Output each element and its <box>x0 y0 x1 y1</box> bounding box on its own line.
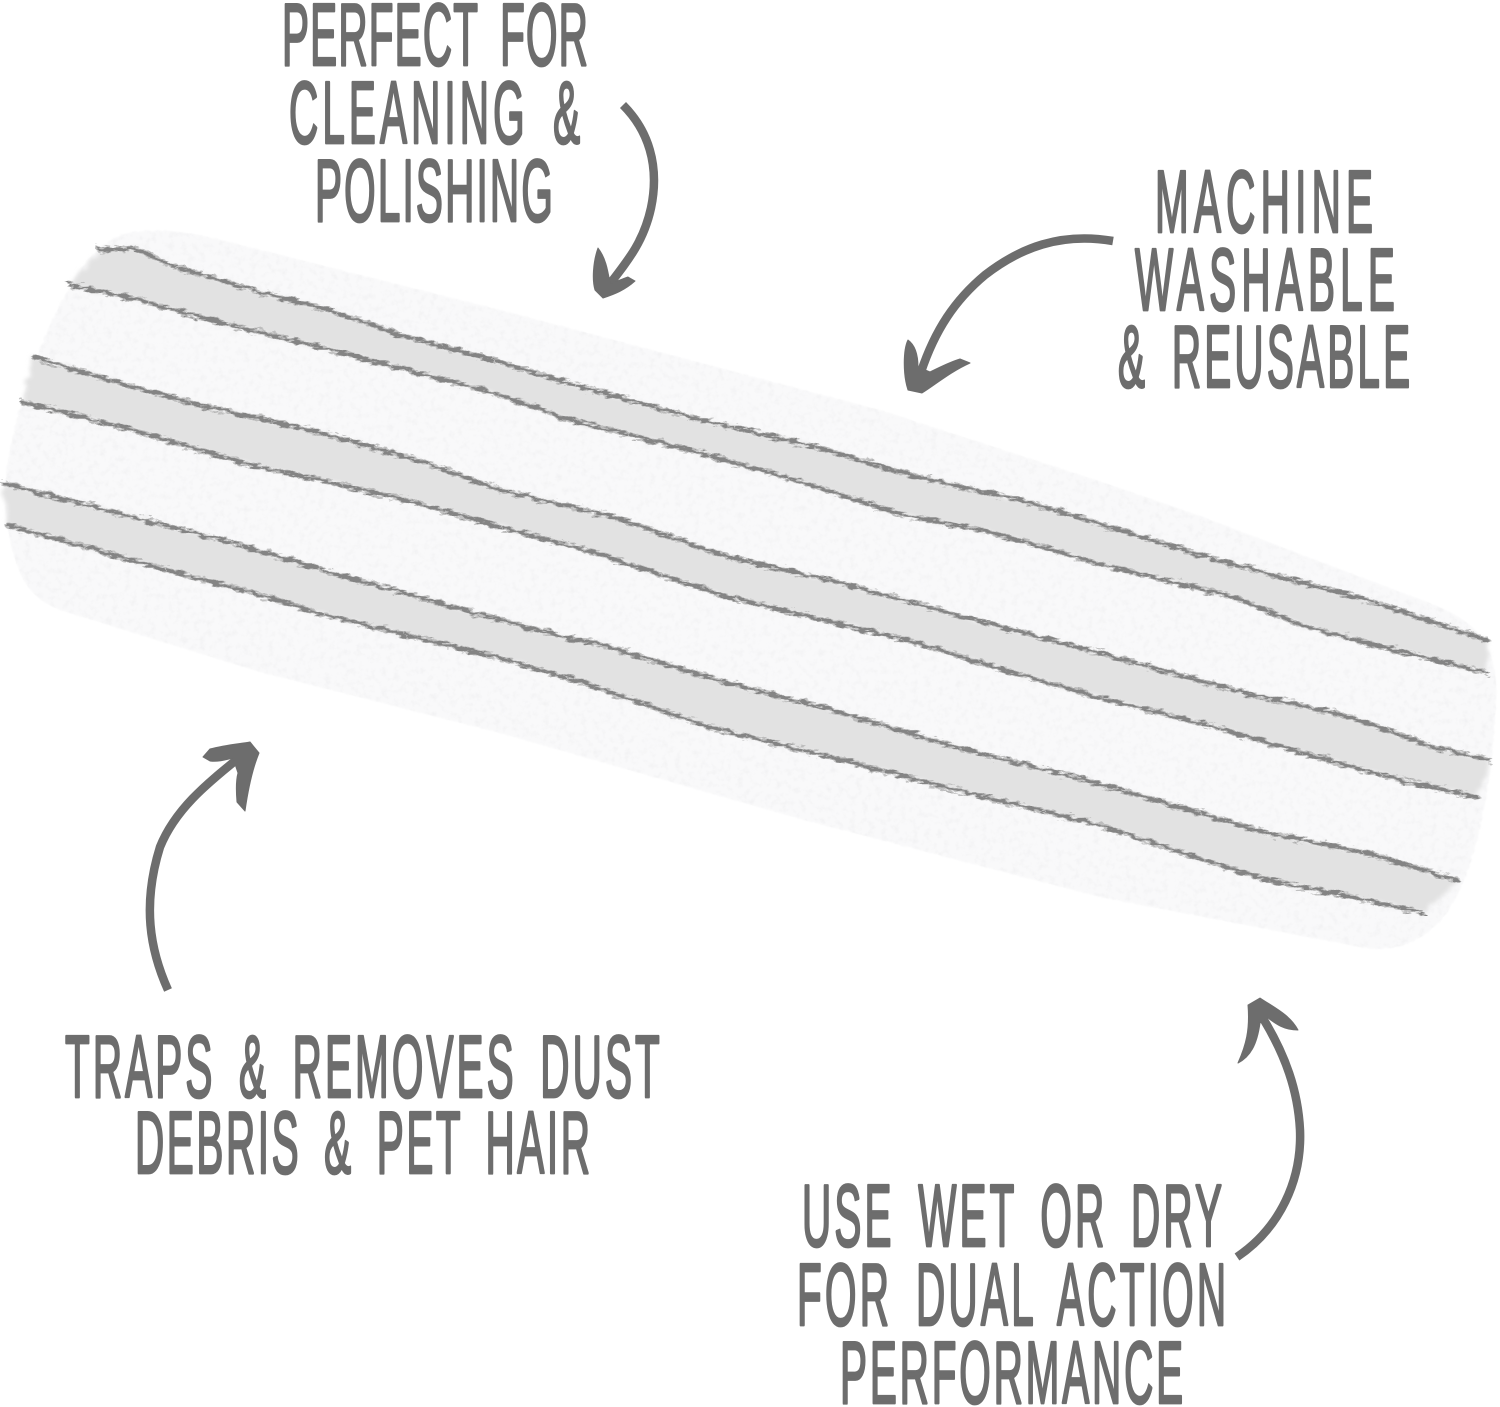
callout: use wet or dry: USE WET OR DRY <box>802 1166 1222 1265</box>
fleece texture <box>0 220 1500 960</box>
stripe edge lines <box>3 248 1490 913</box>
pad body <box>5 230 1496 949</box>
callout: use wet or dry <box>797 1166 1226 1407</box>
arrow: to pad bottom right <box>1237 998 1300 1257</box>
callout: use wet or dry: FOR DUAL ACTION <box>797 1245 1226 1344</box>
arrow: to pad top right <box>904 238 1113 393</box>
gray stripe 2 <box>22 357 1490 797</box>
callout: machine washable and reusable: WASHABLE <box>1135 230 1395 329</box>
callout: traps and removes dust <box>65 1017 660 1192</box>
stripe edge fuzz <box>3 248 1490 913</box>
callout: machine washable and reusable: MACHINE <box>1155 152 1373 251</box>
callout: traps and removes dust: DEBRIS & PET HAIR <box>135 1093 590 1192</box>
mop pad <box>0 220 1500 960</box>
callout: traps and removes dust: TRAPS & REMOVES DUST <box>65 1017 660 1116</box>
callout: perfect for cleaning and polishing: POLISHING <box>315 141 553 240</box>
arrow: to pad bottom left <box>150 742 259 990</box>
callout: perfect for cleaning and polishing: CLEANING & <box>289 63 580 162</box>
gray stripe 1 <box>70 248 1487 673</box>
callout: perfect for cleaning and polishing <box>282 0 588 240</box>
callout: machine washable and reusable <box>1118 152 1410 406</box>
arrow: to top edge of pad <box>593 105 654 298</box>
callout: machine washable and reusable: & REUSABLE <box>1118 307 1410 406</box>
gray stripe 3 <box>3 483 1457 913</box>
